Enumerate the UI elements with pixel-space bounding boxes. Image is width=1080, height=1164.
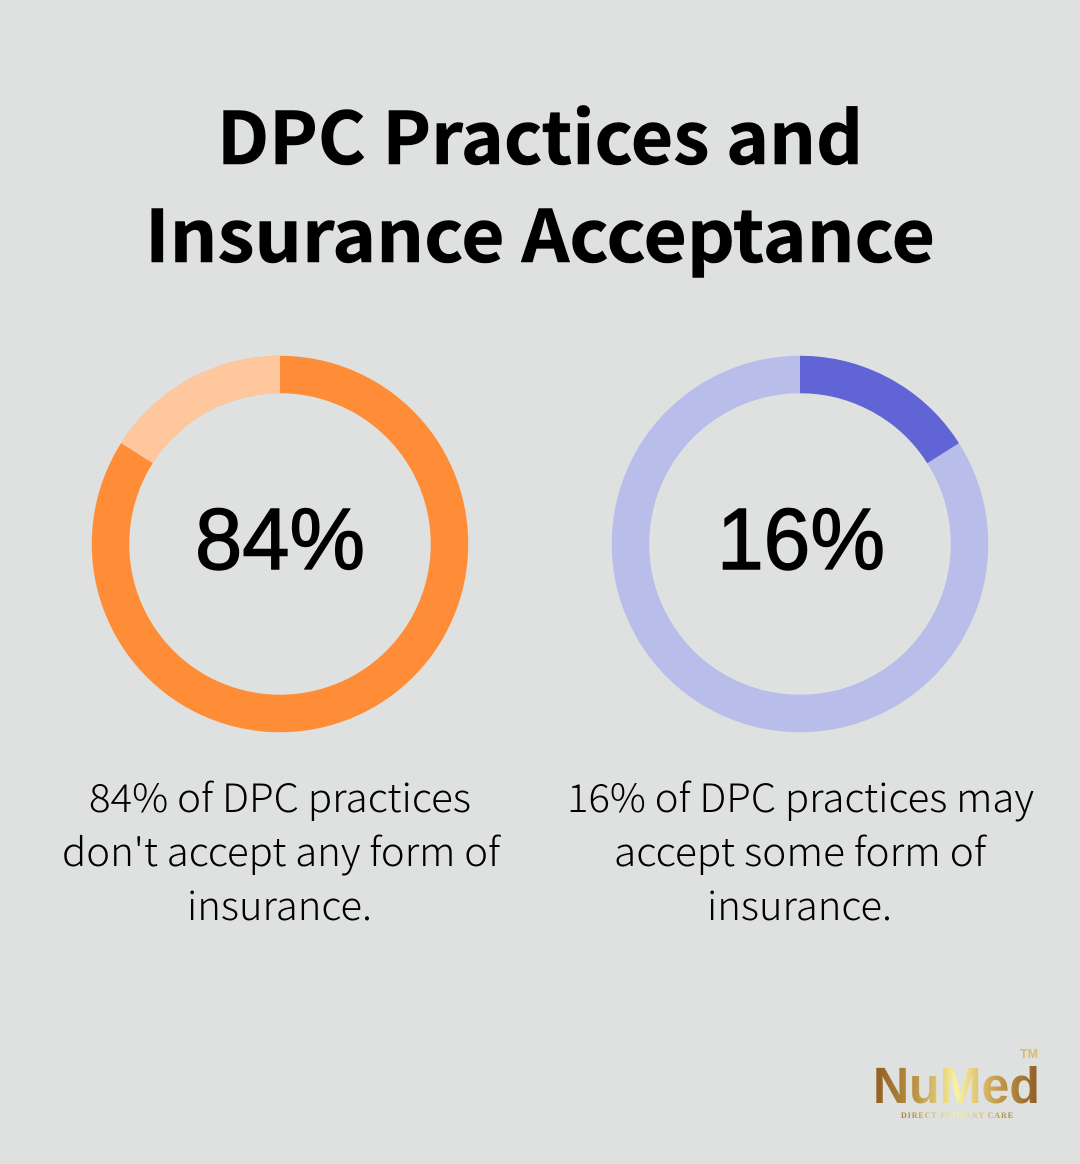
title: Insurance Acceptance xyxy=(145,178,935,283)
donut chart: 16 percent xyxy=(630,374,970,714)
description: 16%: 16% of DPC practices may xyxy=(567,768,1034,824)
description: 16% xyxy=(567,768,1034,932)
description: 84% xyxy=(62,768,501,932)
panel: 16% some insurance xyxy=(567,374,1034,932)
description: 84%: don't accept any form of xyxy=(62,822,501,878)
description: 84%: insurance. xyxy=(187,876,372,932)
logo: NuMed: NuMed xyxy=(873,1057,1040,1114)
value: 84%: 84% xyxy=(195,491,365,588)
panel: 84% no insurance xyxy=(62,374,501,932)
description: 16%: accept some form of xyxy=(614,822,987,878)
description: 84%: 84% of DPC practices xyxy=(89,768,471,824)
title: DPC Practices and xyxy=(217,80,863,185)
description: 16%: insurance. xyxy=(707,876,892,932)
logo: NuMed: TM xyxy=(1020,1046,1038,1061)
title xyxy=(145,80,935,283)
logo: NuMed: DIRECT PRIMARY CARE xyxy=(901,1111,1013,1120)
donut chart: 84 percent xyxy=(110,374,450,714)
value: 16%: 16% xyxy=(717,491,885,588)
